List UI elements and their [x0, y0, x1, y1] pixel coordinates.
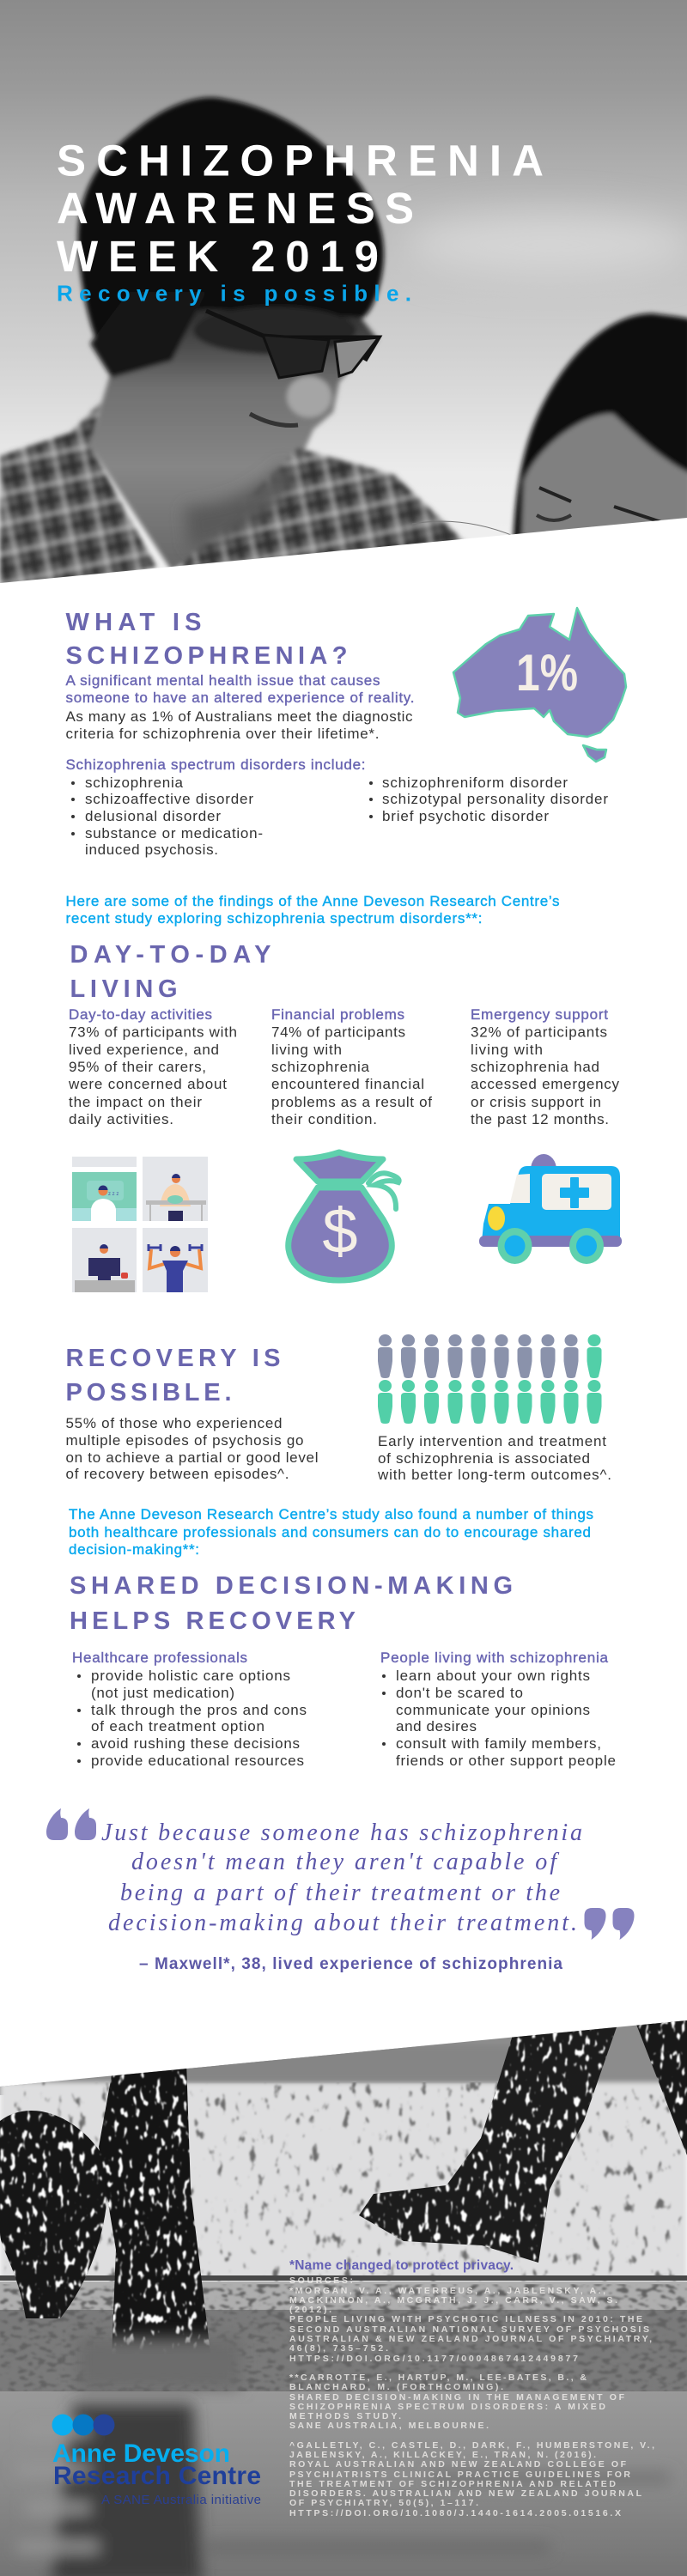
title: SCHIZOPHRENIA	[57, 136, 544, 185]
sources list: PEOPLE LIVING WITH PSYCHOTIC ILLNESS IN 2010: THE	[289, 2314, 642, 2324]
list: healthcare professionals	[72, 1649, 307, 1769]
logo: Anne Deveson Research Centre: A SANE Australia initiative	[101, 2493, 261, 2507]
logo: Anne Deveson Research Centre: Research Centre	[53, 2462, 261, 2490]
quote: Just because someone has schizophrenia	[101, 1820, 582, 1846]
list: healthcare professionals: (not just medication)	[91, 1685, 234, 1701]
heading: recovery is possible: RECOVERY IS	[65, 1345, 280, 1372]
title: WEEK 2019	[57, 232, 379, 281]
icon: opening quotation mark	[46, 1808, 96, 1840]
icon: money bag: $	[322, 1195, 358, 1267]
recovery statistic text: multiple episodes of psychosis go	[65, 1432, 304, 1449]
heading: shared decision-making helps recovery: HELPS RECOVERY	[70, 1607, 356, 1635]
sources list: THE TREATMENT OF SCHIZOPHRENIA AND RELATED	[289, 2479, 616, 2489]
sources list: ^GALLETLY, C., CASTLE, D., DARK, F., HUMBERSTONE, V.,	[289, 2440, 654, 2451]
definition text: A significant mental health issue that causes	[65, 672, 380, 689]
sources list: SCHIZOPHRENIA SPECTRUM DISORDERS: A MIXED	[289, 2402, 605, 2412]
list: healthcare professionals: provide holistic care options	[91, 1668, 290, 1684]
sources list: OF PSYCHIATRY, 50(5), 1–117.	[289, 2498, 478, 2508]
early intervention text: Early intervention and treatment	[378, 1433, 606, 1449]
list: people living with schizophrenia: communicate your opinions	[396, 1702, 590, 1718]
shared decision-making intro: The Anne Deveson Research Centre’s study also found a number of things	[69, 1506, 593, 1522]
list: people living with schizophrenia: People living with schizophrenia	[380, 1649, 609, 1666]
disorder list left: schizophrenia	[85, 775, 184, 791]
recovery statistic text: 55% of those who experienced	[65, 1415, 282, 1431]
heading: day-to-day living: LIVING	[70, 975, 177, 1003]
prevalence text: criteria for schizophrenia over their lifetime*.	[65, 726, 380, 742]
disorder list right	[369, 775, 608, 824]
findings intro: Here are some of the findings of the Anne Deveson Research Centre’s	[65, 893, 560, 909]
icon: ambulance	[479, 1154, 622, 1264]
heading: recovery is possible	[65, 1345, 280, 1406]
column: day-to-day activities: the impact on their	[69, 1094, 202, 1110]
column: financial problems: schizophrenia	[271, 1059, 370, 1075]
sources list: **CARROTTE, E., HARTUP, M., LEE-BATES, B., &	[289, 2372, 587, 2383]
early intervention text: of schizophrenia is associated	[378, 1450, 590, 1467]
icon: money bag	[289, 1152, 399, 1280]
recovery statistic text	[65, 1415, 318, 1482]
column: day-to-day activities: 73% of participants with	[69, 1024, 237, 1041]
subtitle: Recovery is possible.	[57, 280, 411, 306]
sources list: MACKINNON, A., MCGRATH, J. J., CARR, V., SAW, S.	[289, 2295, 617, 2306]
sources list: SOURCES:	[289, 2275, 353, 2286]
panel: shared decision-making	[70, 1572, 616, 1769]
findings intro	[65, 893, 560, 927]
icon: map of Australia with 1%: 1%	[516, 644, 578, 702]
list: healthcare professionals: of each treatment option	[91, 1718, 264, 1735]
heading: shared decision-making helps recovery	[70, 1572, 513, 1635]
sources list: METHODS STUDY.	[289, 2411, 401, 2421]
spectrum disorders subheading: Schizophrenia spectrum disorders include:	[65, 756, 366, 773]
disorder list right: brief psychotic disorder	[382, 808, 549, 824]
footer photo: legs splashing in water, black and white	[0, 2009, 687, 2576]
disorder list left	[71, 775, 263, 858]
disorder list left: substance or medication-	[85, 825, 263, 841]
sources list: SANE AUSTRALIA, MELBOURNE.	[289, 2421, 489, 2431]
quote: being a part of their treatment or the	[120, 1880, 560, 1906]
definition text: someone to have an altered experience of reality.	[65, 690, 414, 706]
column: financial problems: their condition.	[271, 1111, 377, 1127]
column: day-to-day activities	[68, 1006, 237, 1127]
hero photo: two people smiling, black and white	[0, 0, 687, 601]
heading: what is schizophrenia: WHAT IS	[65, 609, 201, 636]
title: AWARENESS	[57, 184, 414, 233]
prevalence text	[65, 708, 413, 742]
chart: 20 people pictogram	[378, 1334, 601, 1424]
findings intro: recent study exploring schizophrenia spectrum disorders**:	[65, 910, 483, 927]
column: day-to-day activities: were concerned about	[68, 1076, 227, 1092]
icon: four daily activities: z z z	[108, 1192, 119, 1197]
quote	[101, 1820, 582, 1936]
sources list: PSYCHIATRISTS CLINICAL PRACTICE GUIDELINES FOR	[289, 2470, 630, 2480]
column: day-to-day activities: daily activities.	[69, 1111, 173, 1127]
heading: what is schizophrenia	[65, 609, 347, 670]
column: emergency support: living with	[471, 1042, 543, 1058]
column: financial problems: living with	[271, 1042, 342, 1058]
sources list: AUSTRALIAN & NEW ZEALAND JOURNAL OF PSYCHIATRY,	[289, 2334, 652, 2344]
sources list: *MORGAN, V. A., WATERREUS, A., JABLENSKY, A.,	[289, 2286, 605, 2296]
column: emergency support: or crisis support in	[471, 1094, 601, 1110]
column: emergency support: the past 12 months.	[471, 1111, 609, 1127]
sources list: (2012).	[289, 2305, 331, 2315]
heading: what is schizophrenia: SCHIZOPHRENIA?	[65, 642, 347, 670]
quote: decision-making about their treatment.	[108, 1910, 577, 1936]
early intervention text	[377, 1433, 611, 1483]
column: emergency support: accessed emergency	[471, 1076, 620, 1092]
definition text	[65, 672, 414, 706]
panel: what is schizophrenia	[65, 609, 608, 858]
column: emergency support: 32% of participants	[471, 1024, 607, 1041]
panel: day-to-day living	[68, 941, 622, 1292]
quote attribution: – Maxwell*, 38, lived experience of schizophrenia	[139, 1955, 562, 1973]
list: healthcare professionals: provide educational resources	[91, 1753, 304, 1769]
sources list: DISORDERS. AUSTRALIAN AND NEW ZEALAND JOURNAL	[289, 2488, 642, 2499]
icon: closing quotation mark	[584, 1908, 634, 1940]
heading: shared decision-making helps recovery: SHARED DECISION-MAKING	[70, 1572, 513, 1600]
sources list: HTTPS://DOI.ORG/10.1177/0004867412449877	[289, 2354, 578, 2364]
sources list: SECOND AUSTRALIAN NATIONAL SURVEY OF PSYCHOSIS	[289, 2324, 649, 2335]
sources list: BLANCHARD, M. (FORTHCOMING).	[289, 2382, 503, 2392]
sources list: HTTPS://DOI.ORG/10.1080/J.1440-1614.2005.01516.X	[289, 2508, 621, 2518]
icon: four daily activities	[72, 1157, 208, 1292]
list: people living with schizophrenia	[380, 1649, 616, 1769]
list: healthcare professionals: avoid rushing these decisions	[91, 1735, 300, 1752]
column: emergency support: schizophrenia had	[471, 1059, 599, 1075]
disorder list left: induced psychosis.	[85, 841, 218, 858]
heading: day-to-day living: DAY-TO-DAY	[70, 941, 271, 969]
column: financial problems: 74% of participants	[271, 1024, 405, 1041]
disorder list right: schizophreniform disorder	[382, 775, 568, 791]
column: financial problems: Financial problems	[271, 1006, 404, 1023]
shared decision-making intro: decision-making**:	[69, 1541, 199, 1558]
sources list: ROYAL AUSTRALIAN AND NEW ZEALAND COLLEGE OF	[289, 2459, 627, 2470]
logo: Anne Deveson Research Centre: Anne Deveson	[52, 2439, 230, 2468]
logo: Anne Deveson Research Centre	[52, 2415, 261, 2507]
column: day-to-day activities: Day-to-day activities	[69, 1006, 212, 1023]
sources list: JABLENSKY, A., KILLACKEY, E., TRAN, N. (2016).	[289, 2450, 596, 2460]
shared decision-making intro: both healthcare professionals and consumers can do to encourage shared	[69, 1524, 591, 1540]
shared decision-making intro	[69, 1506, 593, 1558]
title	[57, 136, 544, 281]
disorder list right: schizotypal personality disorder	[382, 791, 608, 807]
heading: day-to-day living	[70, 941, 271, 1003]
quote: doesn't mean they aren't capable of	[131, 1849, 559, 1875]
list: people living with schizophrenia: don't be scared to	[396, 1685, 523, 1701]
list: people living with schizophrenia: learn about your own rights	[396, 1668, 590, 1684]
prevalence text: As many as 1% of Australians meet the diagnostic	[65, 708, 413, 725]
column: emergency support: Emergency support	[471, 1006, 608, 1023]
column: financial problems	[271, 1006, 432, 1127]
panel: recovery is possible	[65, 1334, 611, 1483]
icon: map of Australia with 1%	[453, 608, 626, 762]
column: financial problems: problems as a result of	[271, 1094, 432, 1110]
column: emergency support	[471, 1006, 620, 1127]
recovery statistic text: of recovery between episodes^.	[65, 1466, 289, 1482]
disorder list left: schizoaffective disorder	[85, 791, 253, 807]
sources list	[289, 2275, 654, 2518]
sources list: 46(8), 735–752.	[289, 2343, 388, 2354]
list: healthcare professionals: talk through the pros and cons	[91, 1702, 307, 1718]
list: healthcare professionals: Healthcare professionals	[72, 1649, 247, 1666]
footnote: name changed: *Name changed to protect privacy.	[289, 2258, 514, 2273]
disorder list left: delusional disorder	[85, 808, 221, 824]
recovery statistic text: on to achieve a partial or good level	[65, 1449, 318, 1466]
sources list: SHARED DECISION-MAKING IN THE MANAGEMENT OF	[289, 2392, 625, 2403]
column: financial problems: encountered financial	[271, 1076, 424, 1092]
heading: recovery is possible: POSSIBLE.	[65, 1379, 232, 1406]
list: people living with schizophrenia: consult with family members,	[396, 1735, 601, 1752]
column: day-to-day activities: lived experience, and	[69, 1042, 219, 1058]
list: people living with schizophrenia: and desires	[396, 1718, 477, 1735]
early intervention text: with better long-term outcomes^.	[377, 1467, 611, 1483]
list: people living with schizophrenia: friends or other support people	[396, 1753, 616, 1769]
column: day-to-day activities: 95% of their carers,	[69, 1059, 206, 1075]
